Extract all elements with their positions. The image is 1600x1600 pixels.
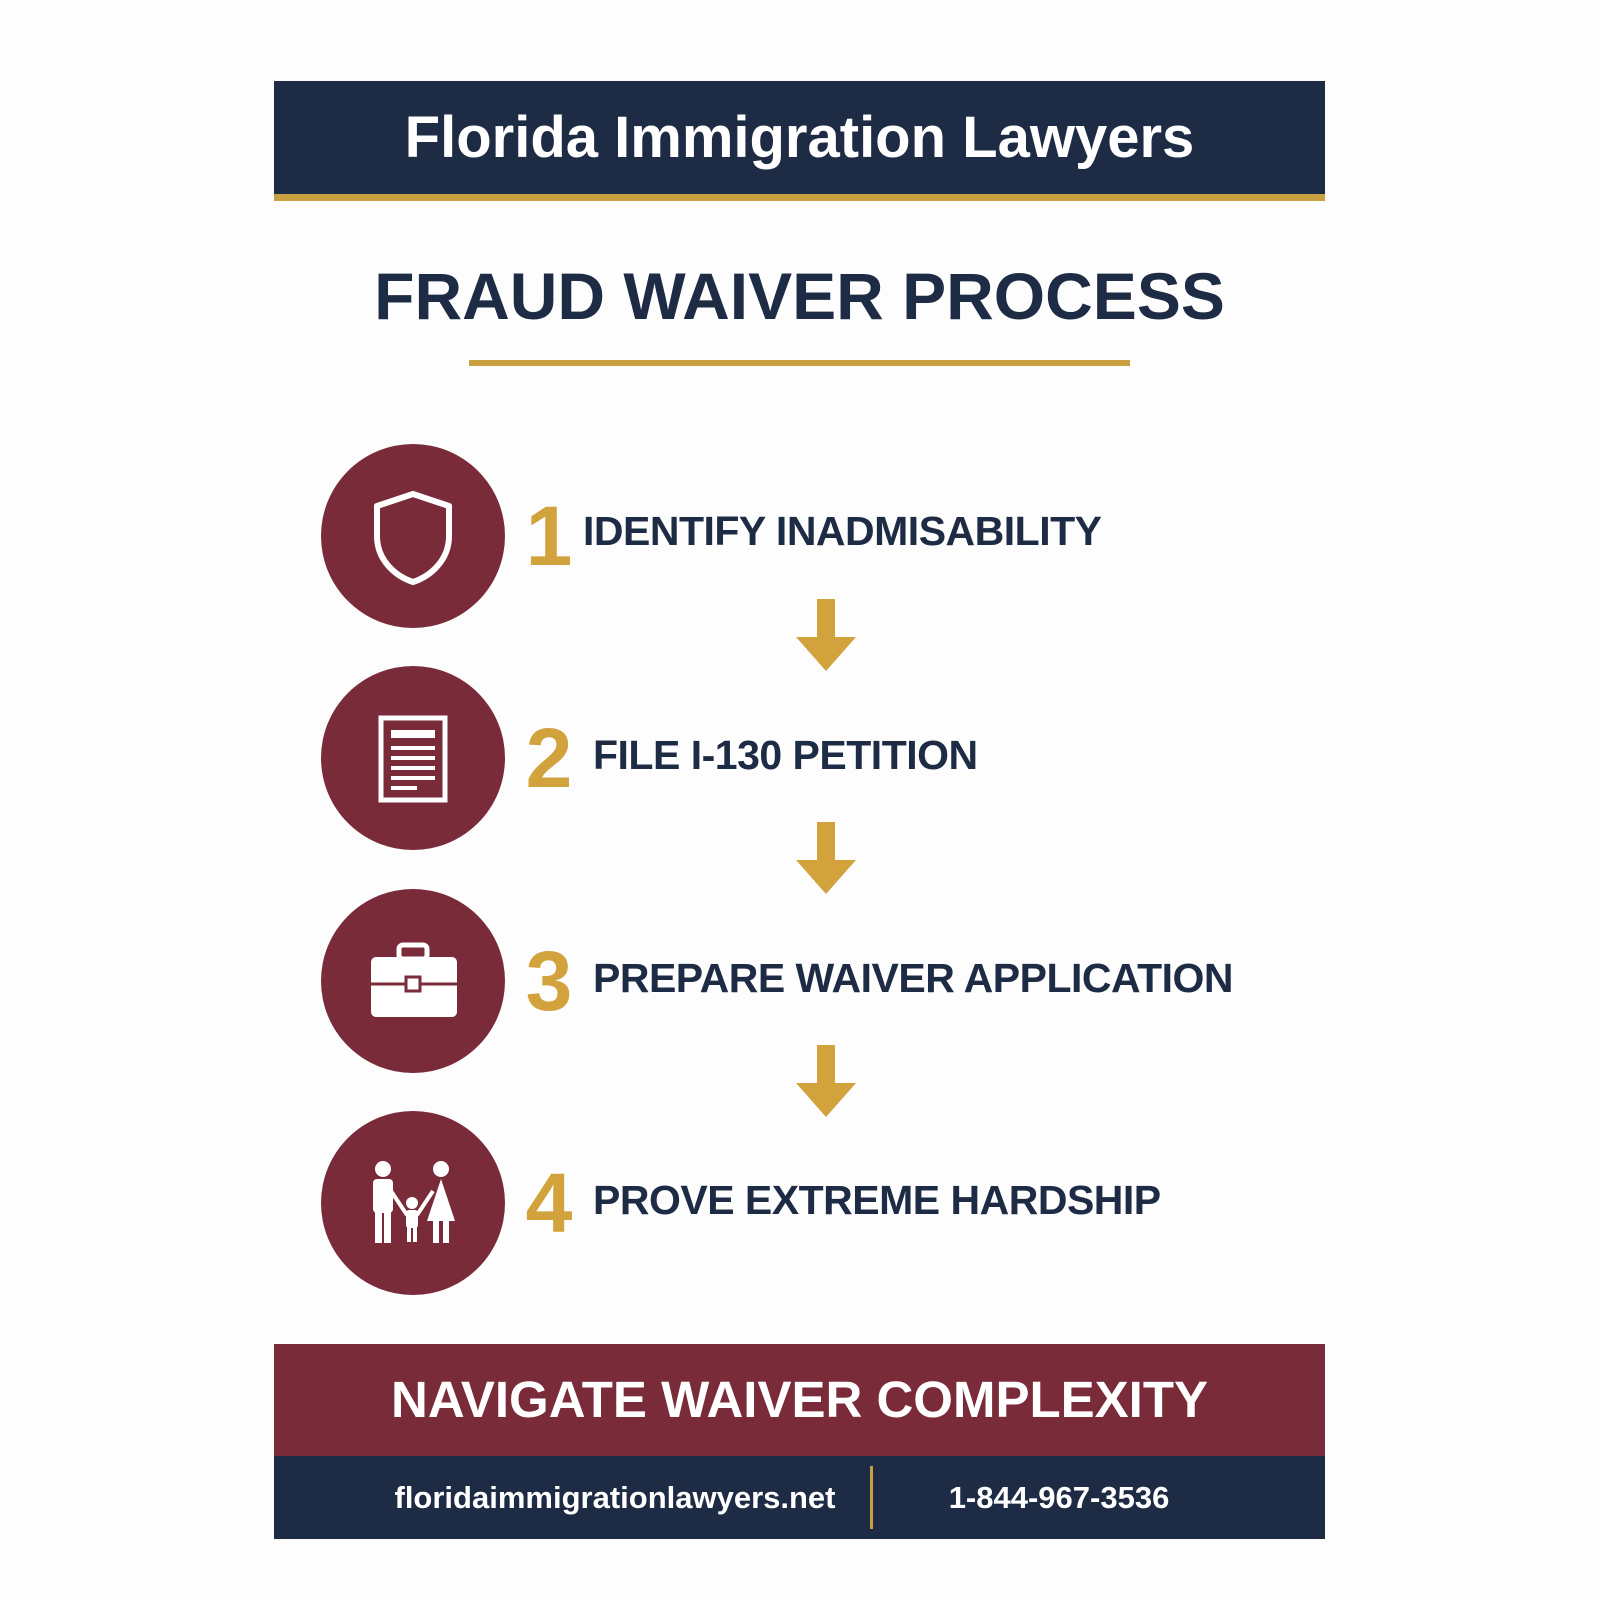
arrow: [796, 822, 856, 894]
header bar: Florida Immigration Lawyers: [405, 105, 1194, 170]
icon: family: [321, 1111, 505, 1295]
step text: IDENTIFY INADMISABILITY: [583, 508, 1101, 554]
icon: shield: [321, 444, 505, 628]
number 4: 4: [526, 1156, 572, 1250]
title underline: [469, 360, 1130, 366]
website: floridaimmigrationlawyers.net: [394, 1480, 836, 1515]
number 1: 1: [526, 489, 572, 583]
step text: PROVE EXTREME HARDSHIP: [593, 1177, 1161, 1223]
banner: navigate waiver complexity: NAVIGATE WAIVER COMPLEXITY: [391, 1371, 1208, 1428]
icon: briefcase: [321, 889, 505, 1073]
arrow: [796, 1045, 856, 1117]
number 2: 2: [526, 711, 572, 805]
step text: PREPARE WAIVER APPLICATION: [593, 955, 1233, 1001]
header bar: [274, 81, 1325, 201]
step 2: [321, 666, 978, 850]
phone: 1-844-967-3536: [949, 1480, 1169, 1515]
arrow: [796, 599, 856, 671]
banner: navigate waiver complexity: [274, 1344, 1325, 1456]
title: FRAUD WAIVER PROCESS: [374, 259, 1225, 333]
divider: [870, 1466, 873, 1529]
step 4: [321, 1111, 1161, 1295]
number 3: 3: [526, 934, 572, 1028]
icon: document: [321, 666, 505, 850]
step 1: [321, 444, 1102, 628]
footer contact bar: [274, 1456, 1325, 1539]
step 3: [321, 889, 1233, 1073]
step text: FILE I-130 PETITION: [593, 732, 978, 778]
